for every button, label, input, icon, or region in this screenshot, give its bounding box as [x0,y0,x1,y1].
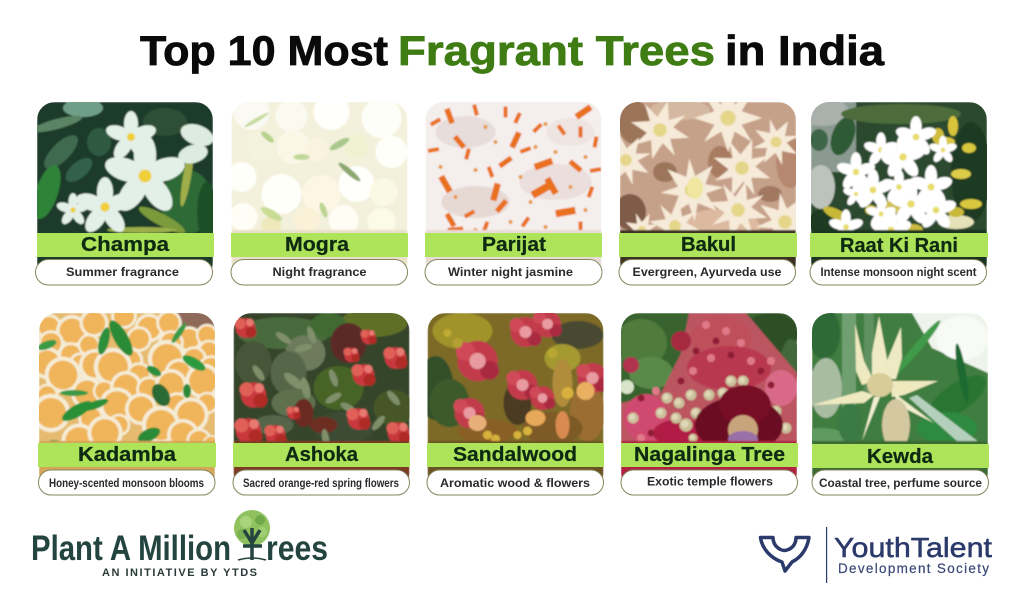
description pill [810,260,986,285]
card: Ashoka [233,309,414,495]
icon: tree crown [234,510,270,560]
name band [37,233,214,257]
title: in India [725,27,885,74]
logo: Youth Talent Development Society [760,527,992,583]
name: Kadamba [78,444,177,466]
photo: Bakul flowers [620,102,796,268]
description pill [621,470,798,495]
name: Mogra [285,234,350,256]
name band [427,443,604,467]
card: Bakul [618,102,797,286]
organisation name: YouthTalent [834,532,992,563]
photo: Raat Ki Rani flowers [811,102,987,268]
name band [231,233,408,257]
name: Parijat [482,234,546,256]
name band [425,233,602,257]
card: Mogra [226,94,408,285]
description pill [233,470,410,495]
photo: Mogra flowers [232,102,408,267]
name band [812,444,989,468]
name: Bakul [681,234,736,256]
description pill: Intense monsoon night scent [820,267,977,279]
logo wordmark end: rees [266,529,328,568]
name: Sandalwood [453,444,577,466]
description pill: Sacred orange-red spring flowers [243,478,399,490]
card: Parijat [425,102,602,285]
description pill: Summer fragrance [66,267,179,279]
description pill: Exotic temple flowers [647,476,773,488]
description pill: Winter night jasmine [448,267,573,279]
title: Top 10 Most [140,27,388,74]
description pill [425,260,602,285]
photo: Nagalinga flowers [621,313,797,478]
name: Champa [81,234,170,256]
title [140,27,885,74]
photo: Champa flowers [37,102,213,268]
photo: Kadamba flowers [39,313,215,478]
card: Nagalinga Tree [615,313,801,495]
title: Fragrant Trees [398,27,715,74]
photo: Sandalwood flowers [428,313,604,478]
logo wordmark: Plant A Million [31,529,231,568]
description pill [36,260,212,285]
name band [619,233,797,257]
name: Kewda [867,446,934,468]
description pill [427,470,604,495]
card: Kewda [812,313,989,496]
icon: Youth Talent emblem [760,538,809,571]
divider line [826,527,827,583]
logo tagline: AN INITIATIVE BY YTDS [102,567,257,579]
description pill: Night fragrance [272,267,366,279]
description pill: Evergreen, Ayurveda use [632,267,782,279]
name: Nagalinga Tree [634,444,785,466]
organisation subtitle: Development Society [838,561,989,576]
name band [810,233,988,257]
card: Kadamba [38,313,216,496]
name band [233,443,410,467]
card: Sandalwood [418,310,608,495]
description pill [231,260,408,285]
description pill [38,470,215,495]
photo: Kewda plant [812,313,988,478]
description pill: Honey-scented monsoon blooms [49,478,204,490]
name: Raat Ki Rani [840,235,958,257]
photo: Ashoka shrub [234,313,410,478]
name band [38,443,216,467]
description pill: Coastal tree, perfume source [819,478,982,490]
card: Champa [28,99,217,285]
description pill: Aromatic wood & flowers [440,478,590,490]
name: Ashoka [285,444,359,466]
photo: Parijat flowers [426,102,602,280]
description pill [619,260,796,285]
description pill [812,470,988,495]
name band [621,443,798,467]
logo: Plant A Million Trees [31,510,328,579]
card: Raat Ki Rani [797,98,991,285]
